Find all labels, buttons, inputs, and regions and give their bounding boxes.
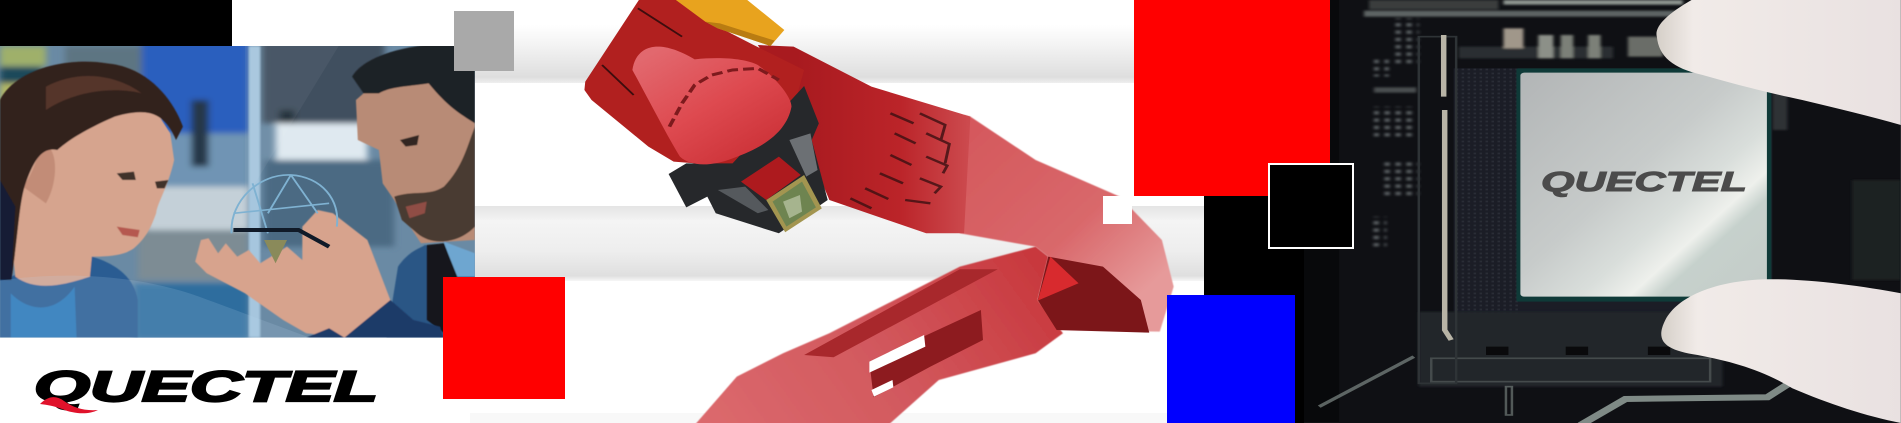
background pillar [249, 46, 260, 338]
Quectel logo [34, 363, 378, 413]
gripper [669, 86, 828, 233]
rounded cap [632, 47, 791, 164]
translucent arc overlay [0, 276, 310, 338]
metal rail [1444, 35, 1451, 340]
white small square [1103, 196, 1132, 224]
black rectangle top left [0, 0, 232, 46]
chip logo text: QUECTEL [1541, 166, 1747, 197]
circuit board photo [1304, 0, 1901, 423]
socket area [1454, 68, 1772, 313]
bright bottom traces [1319, 357, 1800, 423]
diagonal glass reflection [245, 46, 338, 132]
black block [1204, 196, 1304, 423]
lower arm slots [804, 269, 998, 357]
arm tick marks [850, 113, 949, 208]
hologram dome [231, 175, 337, 263]
forearm body [960, 115, 1174, 332]
Quectel logo: QUECTEL [34, 363, 378, 411]
glove bottom [1661, 279, 1901, 423]
woman [0, 62, 183, 338]
chip on gripper [766, 175, 822, 232]
board traces and components [1364, 0, 1901, 280]
arm underside shadow [1038, 257, 1149, 333]
outlined black square [1269, 164, 1353, 248]
background gray bands [470, 25, 1210, 423]
red large square [1134, 0, 1330, 196]
upper shoulder [584, 0, 804, 167]
photo: engineers examining hologram [0, 40, 475, 340]
gray square [454, 11, 514, 71]
red square left [443, 277, 565, 399]
yellow block [674, 0, 784, 46]
hands holding hologram [195, 210, 443, 338]
blue square [1167, 295, 1295, 423]
glove top [1656, 0, 1901, 125]
lower arm [695, 247, 1063, 423]
man [352, 43, 475, 338]
forearm cylinder [758, 45, 970, 233]
chip [1516, 68, 1771, 302]
robot arm holding chip [584, 0, 1174, 423]
